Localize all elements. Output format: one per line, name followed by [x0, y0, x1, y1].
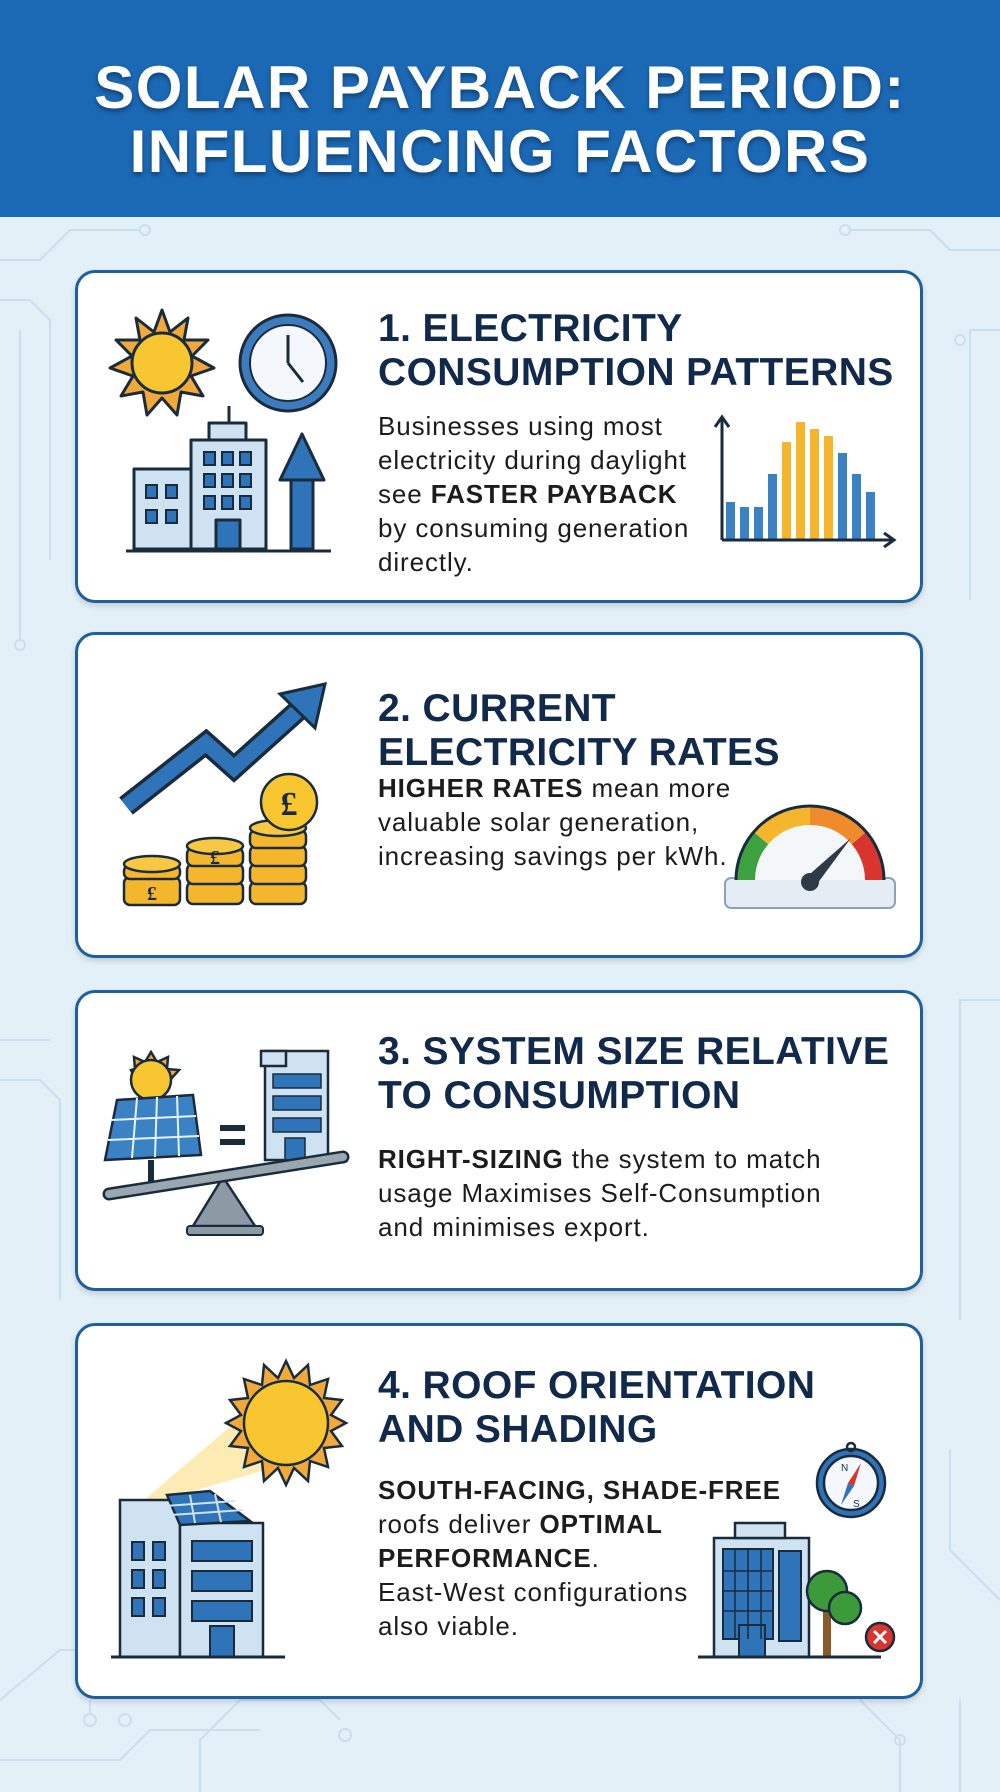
icons: sun beam, buildings, compass, tree: S: [853, 1499, 860, 1510]
panel: system size relative to consumption: [75, 990, 923, 1291]
body text: directly.: [378, 547, 474, 577]
heading: ELECTRICITY RATES: [378, 731, 780, 774]
icons: rising arrow, coins, gauge: £: [147, 883, 157, 905]
icons: rising arrow, coins, gauge: [119, 682, 896, 909]
body text: [378, 773, 731, 871]
heading: 3. SYSTEM SIZE RELATIVE: [378, 1030, 889, 1073]
body text: East-West configurations: [378, 1577, 688, 1607]
body text: [378, 1475, 781, 1641]
body text: roofs deliver OPTIMAL: [378, 1509, 663, 1539]
body text: and minimises export.: [378, 1212, 650, 1242]
icons: sun beam, buildings, compass, tree: [111, 1358, 896, 1658]
body text: [378, 411, 689, 577]
body text: see FASTER PAYBACK: [378, 479, 677, 509]
body text: HIGHER RATES mean more: [378, 773, 731, 803]
body text: valuable solar generation,: [378, 807, 699, 837]
heading: TO CONSUMPTION: [378, 1074, 740, 1117]
heading: [378, 687, 780, 774]
body text: also viable.: [378, 1611, 519, 1641]
heading: [378, 1364, 815, 1451]
icons: rising arrow, coins, gauge: £: [210, 847, 220, 869]
heading: AND SHADING: [378, 1408, 658, 1451]
icons: solar panel, building, seesaw: [102, 1050, 350, 1236]
icons: rising arrow, coins, gauge: £: [280, 786, 298, 823]
body text: by consuming generation: [378, 513, 689, 543]
title: [0, 0, 1000, 217]
heading: 4. ROOF ORIENTATION: [378, 1364, 815, 1407]
icons: sun, clock, building, chart: [108, 308, 896, 552]
heading: CONSUMPTION PATTERNS: [378, 351, 894, 394]
heading: 2. CURRENT: [378, 687, 616, 730]
body text: increasing savings per kWh.: [378, 841, 727, 871]
body text: RIGHT-SIZING the system to match: [378, 1144, 821, 1174]
title: INFLUENCING FACTORS: [130, 118, 870, 185]
body text: SOUTH-FACING, SHADE-FREE: [378, 1475, 781, 1505]
body text: usage Maximises Self-Consumption: [378, 1178, 822, 1208]
body text: electricity during daylight: [378, 445, 687, 475]
body text: Businesses using most: [378, 411, 663, 441]
panel: electricity consumption patterns: [75, 270, 923, 603]
icons: sun beam, buildings, compass, tree: N: [841, 1463, 848, 1474]
heading: 1. ELECTRICITY: [378, 307, 683, 350]
title: SOLAR PAYBACK PERIOD:: [94, 54, 906, 121]
body text: PERFORMANCE.: [378, 1543, 600, 1573]
body text: [378, 1144, 822, 1242]
heading: [378, 1030, 889, 1117]
panel: current electricity rates: [75, 632, 923, 958]
panel: roof orientation and shading: [75, 1323, 923, 1699]
heading: [378, 307, 894, 394]
